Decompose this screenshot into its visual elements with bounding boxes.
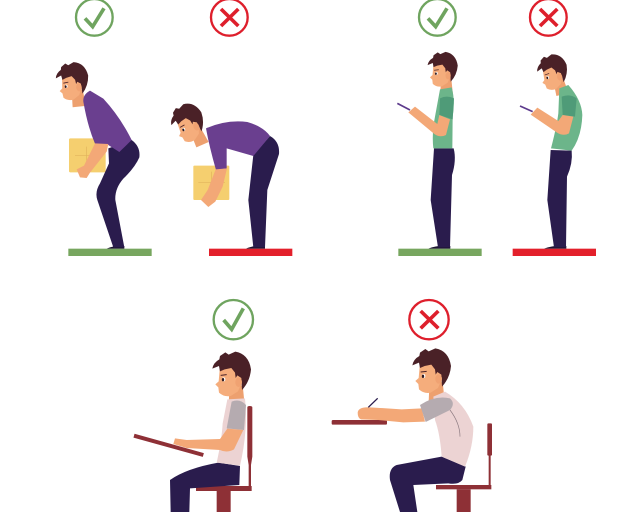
ground bar: red — [513, 249, 596, 256]
figure: straight back lift — [54, 61, 140, 249]
icon: red cross — [211, 0, 248, 36]
icon: red cross — [409, 300, 449, 339]
ground bar: green — [68, 249, 152, 256]
ground bar: green — [398, 249, 482, 256]
chair — [196, 406, 252, 512]
panel: sitting incorrectly — [332, 300, 492, 512]
panel: phone use incorrectly — [513, 0, 596, 256]
panel: phone use correctly — [397, 0, 482, 256]
figure: hunched phone use — [520, 51, 582, 249]
chair — [436, 423, 492, 512]
icon: red cross — [530, 0, 567, 36]
figure: bent back lift — [166, 99, 279, 249]
figure: hunched seated — [358, 348, 473, 512]
figure: upright seated — [134, 352, 251, 512]
desk: tilted — [134, 436, 203, 455]
icon: green check — [76, 0, 113, 36]
panel: lifting correctly — [54, 0, 152, 256]
desk: flat — [332, 420, 387, 425]
panel: sitting correctly — [134, 300, 253, 512]
panel: lifting incorrectly — [166, 0, 292, 256]
ground bar: red — [209, 249, 292, 256]
figure: upright phone use — [397, 52, 458, 249]
icon: green check — [419, 0, 456, 36]
icon: green check — [214, 300, 253, 339]
